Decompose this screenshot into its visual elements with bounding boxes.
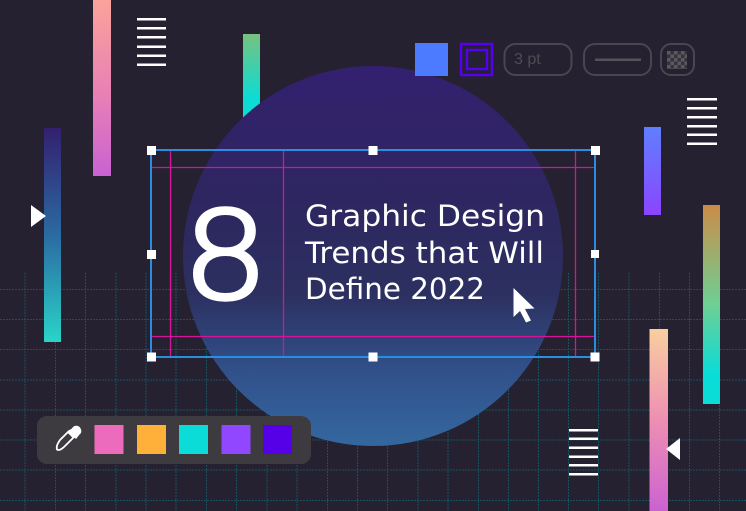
icon: mouse cursor bbox=[514, 288, 534, 322]
swatch: purple bbox=[222, 425, 250, 454]
control: transparency checker bbox=[661, 44, 694, 75]
selection frame with handles bbox=[147, 146, 600, 362]
swatch: pink bbox=[94, 425, 124, 454]
control: line style bbox=[584, 44, 651, 75]
control: stroke weight bbox=[504, 44, 572, 75]
title bbox=[304, 199, 545, 306]
control: stroke weight: 3 pt bbox=[514, 51, 541, 68]
gradient bar: top left pink bbox=[93, 0, 111, 176]
triangle marker: left bbox=[31, 205, 46, 227]
swatch: orange bbox=[137, 425, 166, 454]
gradient bar: left indigo to teal bbox=[44, 128, 61, 342]
title: Define 2022 bbox=[305, 272, 485, 306]
big number 8: 8 bbox=[182, 186, 268, 327]
stripes icon: top left bbox=[137, 18, 166, 66]
central gradient circle bbox=[183, 66, 563, 446]
colour palette toolbar bbox=[37, 416, 311, 464]
gradient bar: right blue violet bbox=[644, 127, 661, 215]
swatch: teal bbox=[179, 425, 208, 454]
gradient bar: bottom right peach to pink bbox=[650, 329, 668, 511]
toolbar: stroke and fill controls bbox=[415, 43, 694, 76]
stripes icon: top right bbox=[687, 98, 717, 145]
swatch: indigo bbox=[263, 425, 292, 454]
title: Graphic Design bbox=[305, 199, 545, 233]
title: Trends that Will bbox=[304, 236, 544, 270]
swatch: blue fill bbox=[415, 43, 448, 76]
triangle marker: right bbox=[666, 438, 680, 460]
icon: eyedropper bbox=[57, 426, 81, 450]
gradient bar: right orange to teal bbox=[703, 205, 720, 404]
gradient bar: top centre green bbox=[243, 34, 260, 124]
stripes icon: bottom right bbox=[569, 429, 598, 476]
magenta guide lines bbox=[152, 151, 595, 357]
background grid bbox=[0, 273, 746, 511]
icon: double square stroke bbox=[461, 44, 492, 75]
